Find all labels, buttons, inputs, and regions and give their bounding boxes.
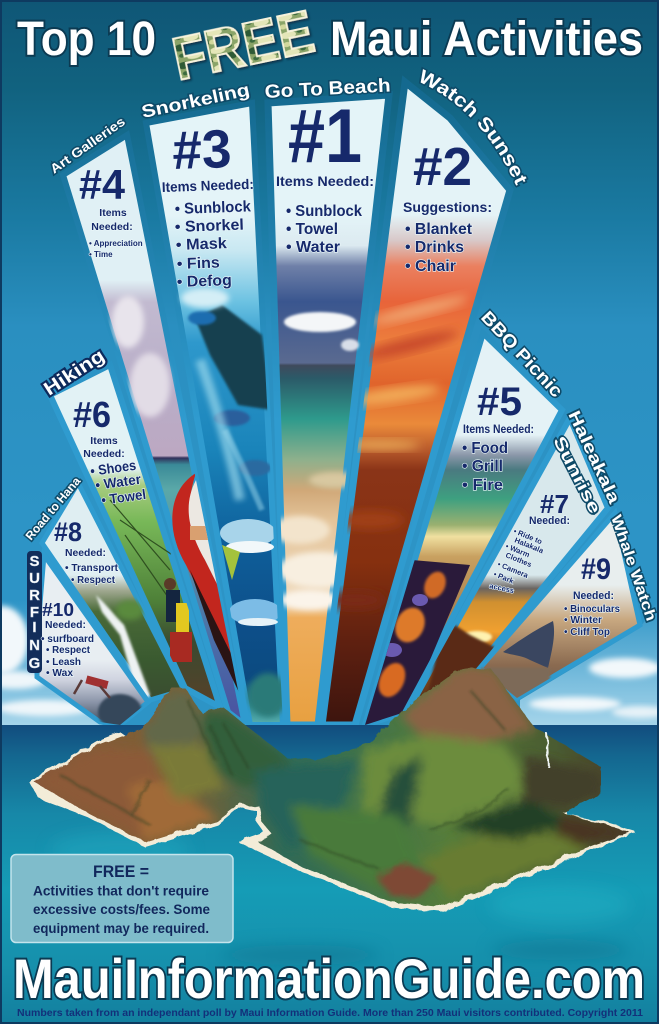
items needed: • Camera xyxy=(496,560,530,580)
items needed: Needed: xyxy=(91,221,133,233)
land xyxy=(34,667,630,907)
items needed: Items Needed: xyxy=(162,176,254,195)
items needed: Needed: xyxy=(65,547,106,559)
items needed xyxy=(41,619,94,679)
number 1: #1 xyxy=(288,94,362,179)
number 7: #7 xyxy=(540,489,569,519)
suggestions xyxy=(403,199,492,275)
title text: Maui Activities: Maui Activities xyxy=(330,13,643,66)
items needed: • Snorkel xyxy=(175,217,244,236)
photo: beach and barbecue xyxy=(360,560,470,725)
items needed xyxy=(564,590,620,638)
items needed: • Winter xyxy=(564,614,602,626)
items needed: • Grill xyxy=(462,458,503,475)
items needed: • Time xyxy=(89,250,113,259)
island of Maui xyxy=(30,665,634,911)
items needed: • Binoculars xyxy=(564,603,620,615)
items needed: • Fire xyxy=(462,477,503,494)
panel: #10 Surfing xyxy=(27,551,148,730)
label: Whale Watch: Whale Watch xyxy=(607,513,659,623)
number 8: #8 xyxy=(54,517,82,547)
panel: #1 Go To Beach xyxy=(264,75,391,725)
label: SURFING xyxy=(27,551,42,673)
items needed xyxy=(276,173,374,256)
label: SURFING: S xyxy=(29,553,40,570)
items needed: Needed: xyxy=(573,590,614,602)
painting: waterfall xyxy=(96,595,150,705)
label: Snorkeling: Snorkeling xyxy=(140,79,251,122)
items needed: Clothes xyxy=(504,551,533,569)
label: Go To Beach: Go To Beach xyxy=(264,75,391,103)
label: Hiking: Hiking xyxy=(40,346,109,400)
items needed: • Warm xyxy=(504,542,531,559)
sky and clouds right xyxy=(520,600,659,725)
items needed: • Shoes xyxy=(89,457,137,479)
items needed: Needed: xyxy=(45,619,86,631)
items needed: • Food xyxy=(462,440,508,457)
items needed: • Appreciation xyxy=(89,239,143,248)
items needed: • Mask xyxy=(176,235,227,254)
items needed: • Sunblock xyxy=(286,203,362,220)
label: Road to Hana: Road to Hana xyxy=(23,474,84,543)
panel: #4 Art Galleries xyxy=(47,114,250,725)
panel: #9 Whale Watch xyxy=(480,513,659,703)
number 6: #6 xyxy=(73,394,111,435)
items needed: access xyxy=(489,581,515,595)
callout body xyxy=(33,882,210,936)
sky and clouds left xyxy=(0,600,120,725)
items needed: • Ride to xyxy=(512,527,544,546)
panel: #6 Hiking xyxy=(40,346,220,707)
items needed: • Wax xyxy=(46,668,73,679)
label: Watch Sunset: Watch Sunset xyxy=(419,67,528,188)
callout body: equipment may be required. xyxy=(33,920,209,936)
items needed: • Fins xyxy=(177,255,220,273)
items needed xyxy=(83,435,147,508)
items needed: • Park xyxy=(492,570,516,586)
items needed: • Leash xyxy=(46,657,81,668)
painting: surfer and wave xyxy=(74,676,142,730)
panel: #8 Road to Hana xyxy=(23,474,184,705)
label: Haleakala: Haleakala xyxy=(564,408,624,507)
items needed: • surfboard xyxy=(41,634,94,645)
number 10: #10 xyxy=(42,600,74,620)
photo: whale breaching xyxy=(480,621,554,703)
items needed: Needed: xyxy=(529,515,570,527)
callout body: excessive costs/fees. Some xyxy=(33,901,210,917)
painting: clouds and canoe xyxy=(112,296,250,705)
items needed: • Cliff Top xyxy=(564,626,610,638)
items needed: • Water xyxy=(286,239,340,256)
items needed xyxy=(89,207,143,259)
ocean shading xyxy=(50,832,630,965)
label: SURFING: N xyxy=(29,637,40,654)
items needed: • Defog xyxy=(177,272,232,291)
items needed xyxy=(65,547,119,586)
items needed: • Respect xyxy=(46,645,91,656)
title xyxy=(17,0,643,93)
panel: #3 Snorkeling xyxy=(140,79,288,725)
items needed: • Water xyxy=(94,471,142,493)
number 2: #2 xyxy=(413,137,472,197)
label: SURFING: U xyxy=(29,570,40,587)
items needed: Items Needed: xyxy=(276,173,374,189)
items needed: • Respect xyxy=(71,575,116,586)
items needed: • Towel xyxy=(286,221,338,238)
suggestions: • Chair xyxy=(405,258,456,275)
panel: #2 Watch Sunset xyxy=(322,67,528,725)
photo: sunrise xyxy=(428,624,495,690)
panel: #7 Haleakala Sunrise xyxy=(410,408,624,707)
items needed: • Towel xyxy=(100,486,147,508)
number 4: #4 xyxy=(79,161,126,208)
suggestions: Suggestions: xyxy=(403,199,492,215)
number 3: #3 xyxy=(171,119,232,181)
painting: diver and fish xyxy=(181,288,288,717)
photo: sky, sea and beach xyxy=(280,310,360,614)
painting: bamboo and hiker xyxy=(110,500,192,662)
photo: sunset over sea xyxy=(325,292,470,609)
label: Sunrise: Sunrise xyxy=(549,433,605,517)
title text: Top 10: Top 10 xyxy=(17,13,156,66)
items needed: Halakala xyxy=(513,536,546,556)
label: Art Galleries: Art Galleries xyxy=(47,114,128,176)
label: BBQ Picnic: BBQ Picnic xyxy=(477,307,567,401)
shoreline foam and sand xyxy=(30,733,634,911)
label: SURFING: G xyxy=(29,655,40,672)
items needed: Items xyxy=(99,207,127,219)
number 5: #5 xyxy=(477,380,522,424)
label: SURFING: F xyxy=(30,604,39,621)
suggestions: • Blanket xyxy=(405,221,472,238)
items needed xyxy=(162,176,254,291)
panel: #5 BBQ Picnic xyxy=(360,307,567,725)
source note: Numbers taken from an independant poll by Maui Information Guide. More than 250 Maui visitors contributed. Copyright 2011 xyxy=(17,1007,643,1019)
callout: FREE definition xyxy=(11,854,233,942)
number 9: #9 xyxy=(581,553,611,586)
items needed: Items xyxy=(90,435,118,447)
terrain: volcano slopes and valleys xyxy=(34,665,628,898)
background xyxy=(0,0,659,725)
label: SURFING: R xyxy=(29,587,40,604)
suggestions: • Drinks xyxy=(405,239,464,256)
waterfall xyxy=(547,733,549,768)
items needed xyxy=(462,424,534,494)
items needed: Needed: xyxy=(83,448,125,460)
label: SURFING: I xyxy=(32,619,37,636)
items needed: • Sunblock xyxy=(175,198,251,218)
items needed: Items Needed: xyxy=(463,424,534,436)
items needed xyxy=(489,515,570,595)
items needed: • Transport xyxy=(65,563,119,574)
ridgelines xyxy=(60,690,510,870)
ocean xyxy=(0,725,659,1024)
red cinder cone xyxy=(376,862,438,898)
callout body: Activities that don't require xyxy=(33,882,209,898)
callout heading: FREE = xyxy=(93,862,149,881)
